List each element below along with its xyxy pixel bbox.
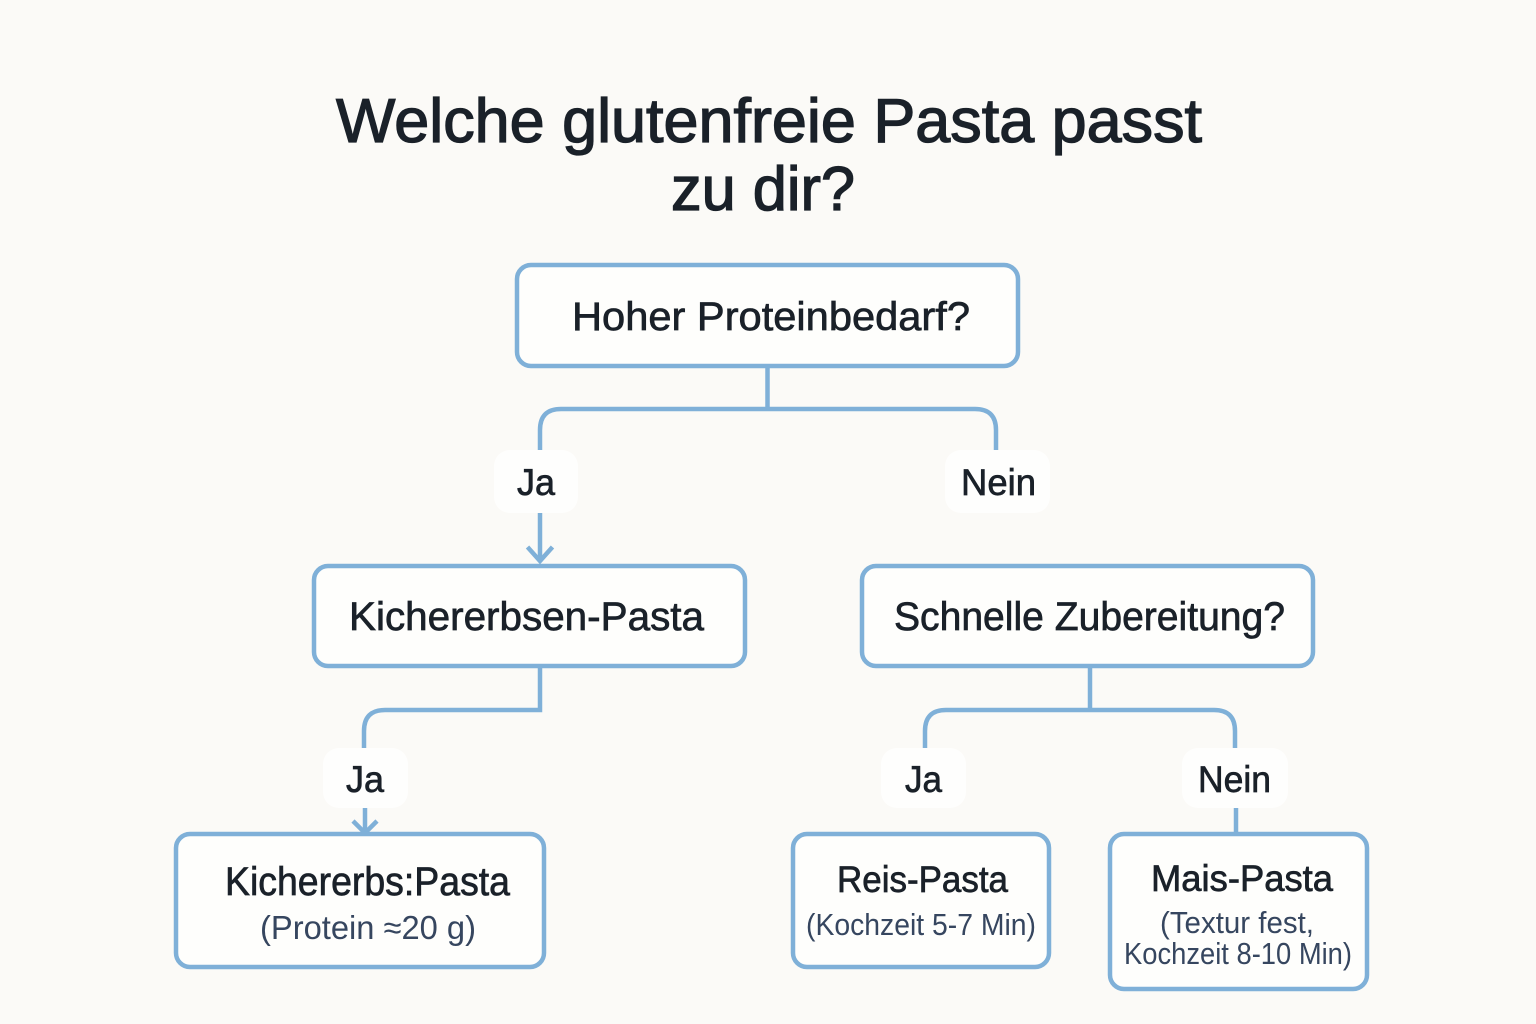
result box: Reis-Pasta: Reis-Pasta bbox=[837, 859, 1008, 900]
label: Nein, under Schnelle Zubereitung bbox=[1182, 748, 1288, 808]
connector: Kichererbsen-Pasta to Ja bbox=[364, 668, 540, 750]
box: Kichererbsen-Pasta bbox=[314, 566, 745, 666]
label: Nein, first level: Nein bbox=[961, 462, 1036, 503]
label: Ja, under Schnelle Zubereitung: Ja bbox=[905, 759, 942, 800]
box: Kichererbsen-Pasta: Kichererbsen-Pasta bbox=[349, 595, 705, 639]
arrow: Ja to Kichererbsen-Pasta bbox=[528, 513, 552, 561]
label: Ja, first level bbox=[494, 450, 578, 513]
label: Ja, under Kichererbsen-Pasta: Ja bbox=[346, 759, 384, 800]
title: Welche glutenfreie Pasta passt bbox=[336, 87, 1202, 156]
box: Hoher Proteinbedarf: Hoher Proteinbedarf? bbox=[572, 295, 970, 339]
box: Schnelle Zubereitung bbox=[862, 566, 1313, 666]
result box: Mais-Pasta: Mais-Pasta bbox=[1151, 858, 1333, 899]
label: Ja, under Kichererbsen-Pasta bbox=[323, 748, 408, 808]
result box: Kichererbs-Pasta: Kichererbs:Pasta bbox=[225, 860, 511, 904]
result box: Kichererbs-Pasta bbox=[176, 834, 544, 967]
result box: Reis-Pasta bbox=[793, 834, 1049, 967]
box: Hoher Proteinbedarf bbox=[517, 265, 1018, 366]
result box: Reis-Pasta: (Kochzeit 5-7 Min) bbox=[806, 907, 1036, 942]
title: zu dir? bbox=[671, 155, 855, 224]
connector: protein question to Ja and Nein bbox=[540, 368, 996, 452]
title bbox=[336, 87, 1202, 224]
result box: Mais-Pasta: (Textur fest, bbox=[1160, 905, 1314, 940]
result box: Kichererbs-Pasta: (Protein ≈20 g) bbox=[260, 909, 476, 946]
label: Ja, first level: Ja bbox=[517, 462, 555, 503]
label: Ja, under Schnelle Zubereitung bbox=[881, 748, 966, 808]
result box: Mais-Pasta bbox=[1110, 834, 1367, 989]
arrow: Ja to Kichererbs-Pasta result bbox=[353, 808, 377, 833]
box: Schnelle Zubereitung: Schnelle Zubereitung? bbox=[894, 595, 1285, 639]
result box: Mais-Pasta: Kochzeit 8-10 Min) bbox=[1124, 936, 1352, 971]
label: Nein, under Schnelle Zubereitung: Nein bbox=[1198, 759, 1271, 800]
connector: quick preparation to Ja and Nein bbox=[925, 668, 1235, 750]
label: Nein, first level bbox=[945, 450, 1050, 513]
connector: Nein to Mais-Pasta bbox=[1234, 808, 1238, 834]
